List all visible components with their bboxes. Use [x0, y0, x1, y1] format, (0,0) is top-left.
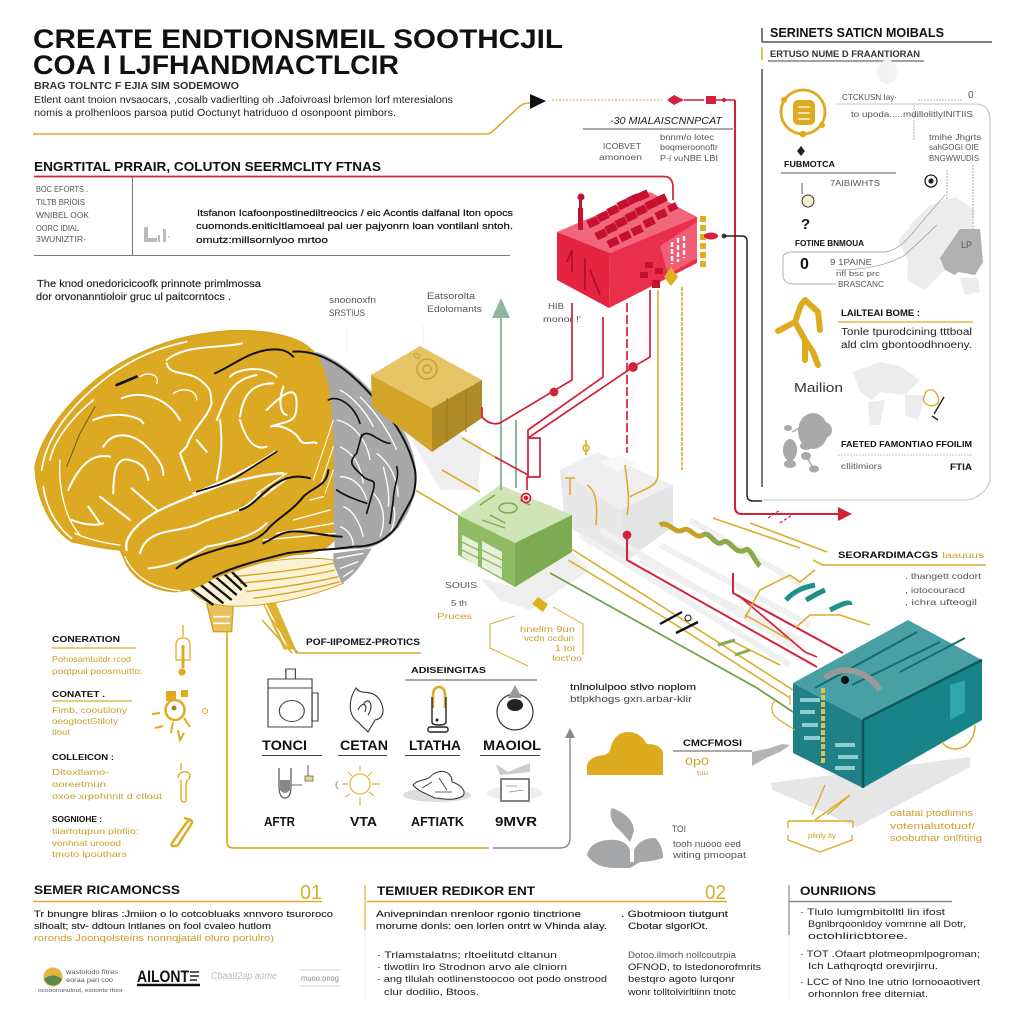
stage: sognione: vonhnat uroood	[52, 838, 121, 848]
icon: sun	[336, 766, 380, 806]
red cube	[557, 189, 726, 308]
arrow: black feeder into panel	[724, 236, 762, 501]
logo: faint script: Cbaatt2ap aome	[211, 971, 277, 982]
logo: ailont: AILONT	[137, 967, 189, 986]
icon: gold cloud	[587, 732, 663, 775]
icon: small arrow	[797, 146, 805, 156]
logo: faint box	[300, 970, 340, 986]
callout: top metrics: -30 MIALAISCNNPCAT	[610, 116, 723, 127]
label: tool	[672, 824, 747, 860]
footer column: temper: · Trlamstalatns; rltoelitutd cltanun	[377, 950, 557, 960]
label: gold footnote: oatatal ptodlimns	[890, 808, 974, 818]
icon: sun badge	[152, 690, 208, 740]
stage: conatet: Fimb, cooutilony	[52, 705, 128, 715]
text block: lateral home: ald clm gbontoodhnoeny.	[841, 340, 972, 351]
pipes: green arrow	[492, 298, 516, 490]
logo: round emblem: wastolodo fitres	[65, 970, 118, 976]
footer column: opinions: octohliricbtoree.	[808, 931, 908, 941]
label: chemical: tuu	[697, 771, 708, 777]
callout: hex note: hnelim 9un	[520, 625, 575, 634]
text block: note: btlpkhogs gxn.arbar-klir	[570, 694, 692, 705]
stage: conatet: oeogtoctGtiloty	[52, 716, 119, 726]
logo: faint box: muoo.onog	[301, 974, 339, 983]
green pipe	[550, 573, 793, 712]
icon labels row two: AFTR	[264, 814, 296, 829]
label: million: Mailion	[794, 380, 843, 395]
subtitle and intro text	[34, 81, 453, 119]
cube labels	[329, 291, 581, 324]
label: storage: Iaauuus	[942, 551, 984, 560]
faint world map	[853, 362, 925, 425]
icon: test tube	[279, 765, 313, 798]
grey cube	[412, 290, 820, 665]
logo: round emblem: ocooonunulout, esoonts rtoor	[38, 988, 123, 994]
footer column: temper: OFNOD, to lstedonorofmrits	[628, 962, 762, 972]
icon: gold knot	[923, 390, 944, 420]
footer column: temper: . Gbotmioon tiutgunt	[621, 909, 729, 919]
stage: colleicon: COLLEICON :	[52, 752, 114, 762]
logo: round emblem: eoraa pan coo	[66, 978, 114, 984]
stat: fubmotca: FUBMOTCA	[784, 160, 835, 169]
stage: colleicon: oxoe xrpohnnit d ctlout	[52, 791, 163, 801]
icon labels row two: 9MVR	[495, 814, 538, 829]
dark map block	[940, 229, 983, 275]
stat: fubmotca: 7AIBIWHTS	[830, 179, 880, 188]
label: tool: witing pmoopat	[672, 850, 747, 860]
left stat list: OORC IDIAL	[36, 223, 79, 233]
icon labels row one: CETAN	[340, 737, 388, 753]
title: CREATE ENDTIONSMEIL SOOTHCJIL	[33, 24, 563, 54]
panel heading: ERTUSO NUME D FRAANTIORAN	[770, 49, 920, 60]
stage: conatet: tlout	[52, 727, 71, 737]
cerebellum	[187, 548, 372, 606]
process label: Pruces	[437, 611, 472, 621]
callout: top metrics: boqmeroonoftr	[660, 142, 718, 152]
callout: hex note: 1 toi	[555, 644, 575, 653]
footer column: opinions: · TOT .Ofaart plotmeopmlpogroman;	[800, 949, 980, 959]
text block: fasted: FAETED FAMONTIAO FFOILIM	[841, 439, 972, 449]
label: storage: . thangett codort	[905, 571, 982, 581]
label: tool: TOI	[672, 824, 686, 834]
brain	[35, 331, 416, 650]
pipes: red	[34, 176, 843, 667]
stat: top note: tmihe Jhgrts	[929, 132, 981, 142]
cerebrum gold mass	[35, 331, 341, 592]
icon labels row one: LTATHA	[409, 737, 461, 753]
cube labels: HIB	[548, 301, 564, 311]
paragraph: strategy	[196, 208, 513, 246]
panel heading	[768, 26, 944, 61]
footer column: temper	[365, 882, 762, 1000]
stat: top note	[842, 90, 981, 230]
icon: small bulb	[801, 183, 814, 233]
icon: bell	[176, 625, 190, 675]
list: left stages	[52, 625, 208, 859]
icon: gold ring	[781, 90, 825, 137]
text block: fasted: cIlitimiors	[841, 462, 882, 471]
footer column: opinions: Bgnlbrqoonldoy vomrnne all Dotr,	[808, 919, 966, 929]
panel heading: SERINETS SATICN MOIBALS	[770, 26, 944, 40]
stat: zero box: 9 1PAINE	[830, 258, 872, 267]
process label: SOUIS	[445, 580, 477, 590]
arrow: gold connector to top	[33, 94, 662, 134]
green cube	[458, 485, 590, 610]
icon labels row two	[264, 814, 538, 829]
stat: fubmotca	[781, 160, 896, 188]
stage: sognione: tiiartotqpun plotlio:	[52, 826, 139, 836]
red cube fins	[578, 189, 678, 288]
brain caption: dor orvonanntioloir gruc ul paitcorntocs .	[36, 292, 231, 303]
text block: lateral home	[838, 308, 973, 351]
footer column: summary	[33, 882, 333, 943]
icon labels row one: TONCI	[262, 737, 307, 753]
footer column: opinions: OUNRIIONS	[800, 886, 876, 898]
gold sprig under container: plinly lty	[808, 833, 837, 840]
icon: gold branch	[778, 300, 820, 365]
label: storage: , ichra ufteogil	[905, 597, 977, 607]
stat: top note: sahGOGI OIE	[929, 142, 979, 152]
subtitle and intro text: BRAG TOLNTC F EJIA SIM SODEMOWO	[34, 81, 239, 92]
callout: top metrics: amonoen	[599, 152, 642, 162]
cube labels: Edolomants	[427, 304, 482, 315]
gold sprig under container	[788, 785, 853, 852]
mini bar chart	[144, 227, 170, 242]
teal container	[770, 620, 982, 827]
subtitle and intro text: nomis a prolhenloos parsoa putid Ooctunyt hatriduoo d osonpoont pimbors.	[34, 108, 396, 119]
text block: fasted: FTIA	[950, 462, 973, 472]
process label	[437, 580, 477, 621]
footer column: summary: roronds Joonqolsteins nonnqjatall oluro porlulro)	[34, 933, 274, 943]
stat: top note: CTCKUSN Iay·	[842, 92, 897, 102]
stage: conseration	[52, 634, 143, 676]
icon: grey fragments	[752, 744, 790, 766]
label: gold footnote	[890, 808, 982, 843]
icon labels row two: AFTIATK	[411, 814, 465, 829]
coil	[660, 524, 850, 610]
icon: numbered dot	[925, 175, 937, 187]
white sulci	[42, 342, 335, 591]
stage: colleicon: Ditoxtlamo-	[52, 767, 109, 777]
gold cube	[347, 326, 482, 452]
footer column: opinions	[789, 885, 981, 1000]
label: chemical	[673, 738, 752, 777]
footer column: opinions: Ich Lathqroqtd orevirjirru.	[808, 961, 938, 971]
label: storage	[822, 550, 986, 607]
stat: zero box: FOTINE BNMOUA	[795, 239, 864, 248]
footer column: temper: clur dodilio, Btoos.	[384, 987, 479, 997]
footer column: temper: Dotoo.ilmorh nollcoutrpia	[628, 950, 736, 960]
icon: grey sprout	[587, 808, 663, 868]
title	[33, 24, 563, 80]
stat: top note: BNGWWUDIS	[929, 153, 979, 163]
icon: shell	[350, 688, 383, 732]
stage: colleicon: ooreetmun	[52, 779, 106, 789]
callout: top metrics: ICOBVET	[603, 141, 641, 151]
callout: hex note	[490, 597, 583, 666]
heading: adjacent: ADISEINGITAS	[411, 665, 486, 675]
text block: fasted	[838, 439, 973, 472]
process label: 5 th	[451, 598, 467, 608]
subtitle and intro text: Etlent oant tnoion nvsaocars, ,cosalb vadierlting oh .Jafoivroasl brlemon lorf mteresialons	[34, 95, 453, 106]
left stat list: BOC EFORTS .	[36, 184, 88, 194]
left stat list: 3WUNIZTIR-	[36, 234, 86, 244]
icon: gold capsule	[428, 687, 448, 732]
footer column: summary: 01	[300, 882, 322, 904]
label: storage: SEORARDIMACGS	[838, 550, 938, 561]
callout: hex note: vcdn ocdun	[524, 634, 574, 643]
icon labels row one: MAOIOL	[483, 737, 541, 753]
logo: round emblem	[38, 968, 123, 994]
cerebrum grey lobe	[315, 352, 416, 550]
brain caption	[36, 279, 261, 303]
footer column: temper: Anivepnindan nrenloor rgonio tinctrione	[376, 909, 581, 919]
heading: adjacent	[405, 665, 537, 680]
label: gold footnote: votemalutotuof/	[890, 821, 976, 831]
grey lobe striations	[337, 390, 398, 547]
footer column: temper: · tlwotlin lro Strodnon arvo ale clniorn	[377, 962, 567, 972]
label: gold footnote: soobuthar onlfiting	[890, 833, 982, 843]
brain caption: The knod onedoricicoofk prinnote primlmossa	[37, 279, 261, 290]
left stat list	[36, 184, 89, 244]
footer column: opinions: · LCC of Nno Ine utrio Iornooaotivert	[800, 977, 981, 987]
icon: washer	[268, 669, 318, 727]
paragraph: strategy: omutz:millsornlyoo mrtoo	[196, 235, 328, 246]
panel: adjacent icons grid	[227, 620, 575, 848]
footer column: temper: wonr tolltolvirltiinn tnotc	[627, 987, 737, 997]
stage: conatet	[52, 689, 132, 737]
stat: top note: 0	[968, 90, 974, 101]
stage: conseration: poqtpuil poosmuitto:	[52, 666, 143, 676]
callout: hex note: Ioct'oo	[552, 654, 583, 663]
icon labels row one	[262, 737, 541, 756]
stage: conatet: CONATET .	[52, 689, 105, 699]
left stat list: WNIBEL OOK	[36, 210, 89, 220]
footer column: summary: Tr bnungre bliras :Jmiion o lo cotcobluaks xnnvoro tsuroroco	[34, 909, 333, 919]
left stat list: TILTB BRIOIS	[36, 197, 85, 207]
callout: top metrics: bnnm/o lotec	[660, 132, 715, 142]
pipes: gold	[415, 287, 870, 698]
stat: zero box: BRASCANC	[838, 280, 884, 289]
cube labels: SRSTIUS	[329, 308, 365, 318]
stage: colleicon	[52, 752, 163, 801]
cube labels: Eatsorolta	[427, 291, 476, 302]
paragraph: strategy: cuomonds.eniticItlamoeal pal uer pajyonrn loan vontilanl sntoh.	[196, 221, 513, 232]
label: tool: tooh nuooo eed	[673, 839, 741, 849]
clips	[660, 612, 750, 655]
stage: sognione: SOGNIOHE :	[52, 814, 102, 824]
text block: note	[570, 682, 696, 705]
icon: grey blobs	[783, 413, 832, 472]
stat: zero box: 0	[800, 256, 809, 273]
footer column: temper: bestqro agoto lurqonr	[628, 974, 735, 984]
icon: small bulb: ?	[801, 216, 810, 233]
callout: top metrics	[583, 116, 733, 163]
cube labels: snoonoxfn	[329, 295, 376, 305]
label: storage: , iotocouracd	[905, 585, 965, 595]
footer column: opinions: · Tlulo lumgmbitolltl lin ifost	[800, 907, 946, 917]
stat: zero box	[783, 195, 945, 289]
cube labels: monor !'	[543, 314, 581, 324]
heading: proteins	[262, 620, 421, 653]
icon labels row two: VTA	[350, 814, 378, 829]
text block: lateral home: Tonle tpurodcining tttboal	[841, 327, 972, 338]
stat: zero box: nfl bsc prc	[836, 269, 880, 278]
valve	[664, 216, 726, 286]
heading: proteins: POF-IIPOMEZ-PROTICS	[306, 637, 420, 647]
stat: top note: to upoda.....mdillolitlyINlTIIS	[851, 110, 973, 119]
paragraph: strategy: Itsfanon Icafoonpostinediltreocics / eic Acontis dalfanal Iton opocs	[197, 208, 513, 219]
footer column: opinions: orhonnlon free diterniat.	[808, 989, 928, 999]
footer column: summary: SEMER RICAMONCSS	[34, 885, 180, 897]
label: chemical: CMCFMOSI	[683, 738, 742, 748]
footer column: temper: · ang tllulah ootlinenstoocoo oot podo onstrood	[377, 974, 607, 984]
faint map	[877, 60, 980, 295]
footer column: temper: TEMIUER REDIKOR ENT	[377, 886, 535, 898]
footer column: summary: slhoalt; stv- ddtoun lntlanes on fool cvaleo hutlom	[34, 921, 271, 931]
stage: sognione	[52, 814, 139, 859]
title: COA I LJFHANDMACTLCIR	[33, 50, 399, 80]
icon: sketch	[403, 771, 471, 802]
icon: screen	[487, 763, 543, 801]
footer column: temper: 02	[705, 882, 726, 904]
text block: note: tnlnolulpoo stlvo noplom	[570, 682, 696, 693]
label: chemical: 0p0	[685, 756, 709, 768]
panel: right data panel	[762, 26, 992, 500]
icon: hook	[178, 763, 190, 802]
footer column: temper: morume donls: oen lorlen ontrt w Vhinda aIay.	[376, 921, 607, 931]
brain stem	[207, 573, 297, 650]
dark map block: LP	[961, 240, 972, 250]
section heading: strategy: ENGRTITAL PRRAIR, COLUTON SEERMCLITY FTNAS	[34, 159, 381, 174]
text block: lateral home: LAILTEAI BOME :	[841, 308, 920, 318]
arrow: red feeder into panel	[667, 95, 852, 523]
icon: pin	[172, 818, 192, 846]
stage: sognione: tmoto lpouthars	[52, 849, 127, 859]
stage: conseration: Pohosamtuitdr rcod	[52, 654, 131, 664]
icon: globe	[497, 685, 533, 730]
black outlines	[67, 349, 416, 577]
callout: top metrics: P-i vuNBE LBI	[660, 153, 718, 163]
footer column: temper: Cbotar slgorlOt.	[628, 921, 708, 931]
stage: conseration: CONERATION	[52, 634, 120, 644]
footer logos	[38, 967, 340, 994]
